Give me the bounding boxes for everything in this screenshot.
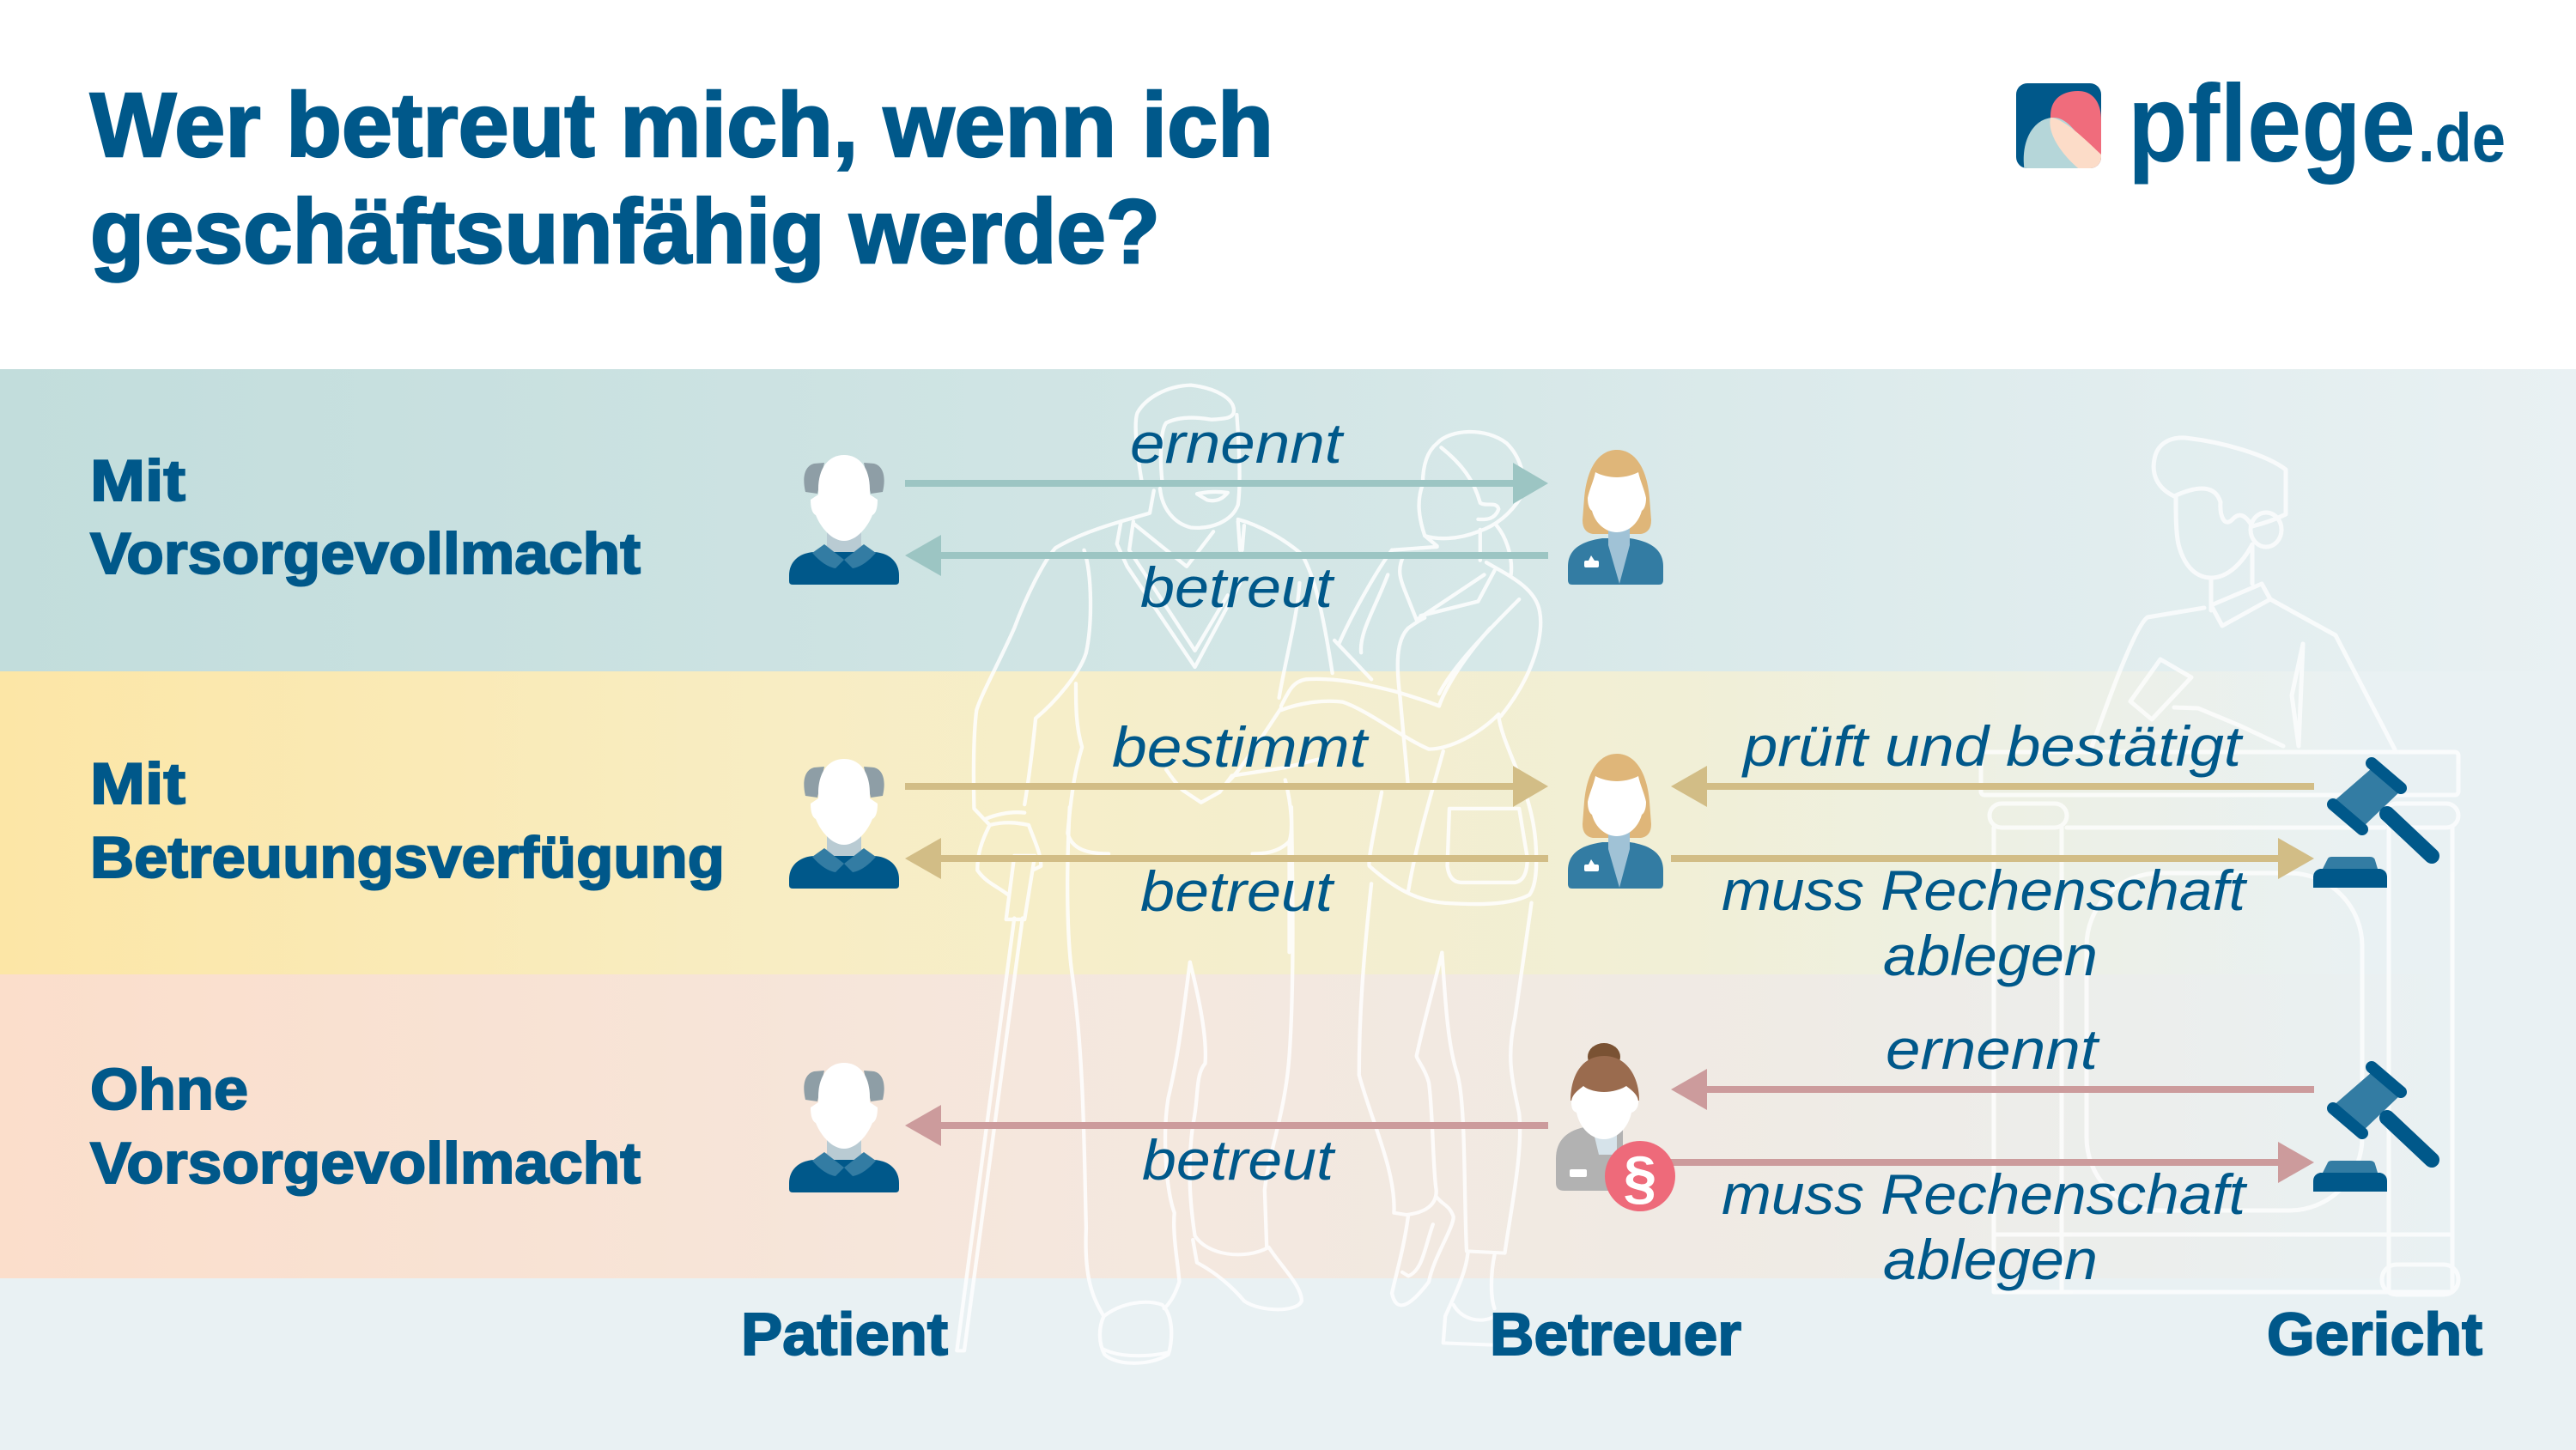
background line art: patient and carer [957,385,1540,1363]
label: betreut row 1: betreut [1140,555,1335,619]
arrow: court to carer row 3 [1671,1069,2314,1110]
arrow: Mit Vorsorgevollmacht patient to carer [905,463,1548,504]
logo: pflege.de: .de [2418,100,2506,176]
icon: gavel row 2 [2313,763,2432,888]
panel: Ohne Vorsorgevollmacht band [0,974,2576,1278]
footer band [0,1278,2576,1450]
arrow: Mit Betreuungsverfügung carer to patient [905,838,1548,879]
label: ernennt row 3: ernennt [1886,1017,2100,1081]
panel: Mit Vorsorgevollmacht band [0,369,2576,672]
title [90,75,1273,282]
column label: Betreuer: Betreuer [1490,1301,1741,1368]
arrow: carer to court row 3 [1666,1142,2314,1183]
arrow: carer to court row 2 [1671,838,2314,879]
row label: Mit Vorsorgevollmacht: Vorsorgevollmacht [90,521,641,586]
arrow: carer to patient row 3 [905,1105,1548,1146]
label: muss Rechenschaft ablegen row 2: ablegen [1883,924,2098,987]
label: muss Rechenschaft ablegen row 2: muss Rechenschaft [1722,858,2248,922]
icon: carer row 1 [1568,450,1663,585]
row label: Mit Vorsorgevollmacht [90,448,641,586]
label: muss Rechenschaft ablegen row 3 [1722,1162,2248,1291]
row label: Ohne Vorsorgevollmacht: Ohne [90,1057,248,1122]
label: bestimmt: bestimmt [1112,715,1370,779]
title: Wer betreut mich, wenn ich [90,75,1273,176]
icon: gavel row 3 [2313,1067,2432,1192]
icon: patient row 2 [789,759,899,889]
panel: Mit Betreuungsverfügung band [0,671,2576,975]
row label: Mit Betreuungsverfügung: Betreuungsverfügung [90,825,725,890]
row label: Mit Vorsorgevollmacht: Mit [90,448,185,513]
title: geschäftsunfähig werde? [90,181,1160,282]
icon: paragraph badge: § [1624,1144,1656,1210]
column label: Patient: Patient [741,1301,948,1368]
background line art: judge at desk [1981,438,2458,1295]
label: muss Rechenschaft ablegen row 3: ablegen [1883,1228,2098,1291]
label: betreut row 3: betreut [1142,1128,1336,1192]
icon: patient row 1 [789,455,899,585]
arrow: Mit Betreuungsverfügung patient to carer [905,766,1548,807]
icon: carer row 2 [1568,754,1663,889]
row label: Mit Betreuungsverfügung: Mit [90,751,185,816]
row label: Ohne Vorsorgevollmacht [90,1057,641,1196]
label: muss Rechenschaft ablegen row 3: muss Rechenschaft [1722,1162,2248,1226]
icon: professional carer row 3 [1556,1043,1639,1191]
column label: Gericht: Gericht [2267,1301,2482,1368]
row label: Ohne Vorsorgevollmacht: Vorsorgevollmacht [90,1131,641,1196]
label: ernennt: ernennt [1130,411,1345,475]
label: prüft und bestätigt: prüft und bestätigt [1741,714,2244,778]
arrow: court to carer row 2 [1671,766,2314,807]
arrow: Mit Vorsorgevollmacht carer to patient [905,535,1548,576]
label: betreut row 2: betreut [1140,859,1335,923]
row label: Mit Betreuungsverfügung [90,751,725,890]
logo: pflege.de [2016,82,2504,185]
label: muss Rechenschaft ablegen row 2 [1722,858,2248,987]
icon: patient row 3 [789,1063,899,1192]
logo mark [2016,83,2101,172]
logo wordmark: pflege [2128,63,2415,185]
icon: paragraph badge [1605,1141,1675,1211]
